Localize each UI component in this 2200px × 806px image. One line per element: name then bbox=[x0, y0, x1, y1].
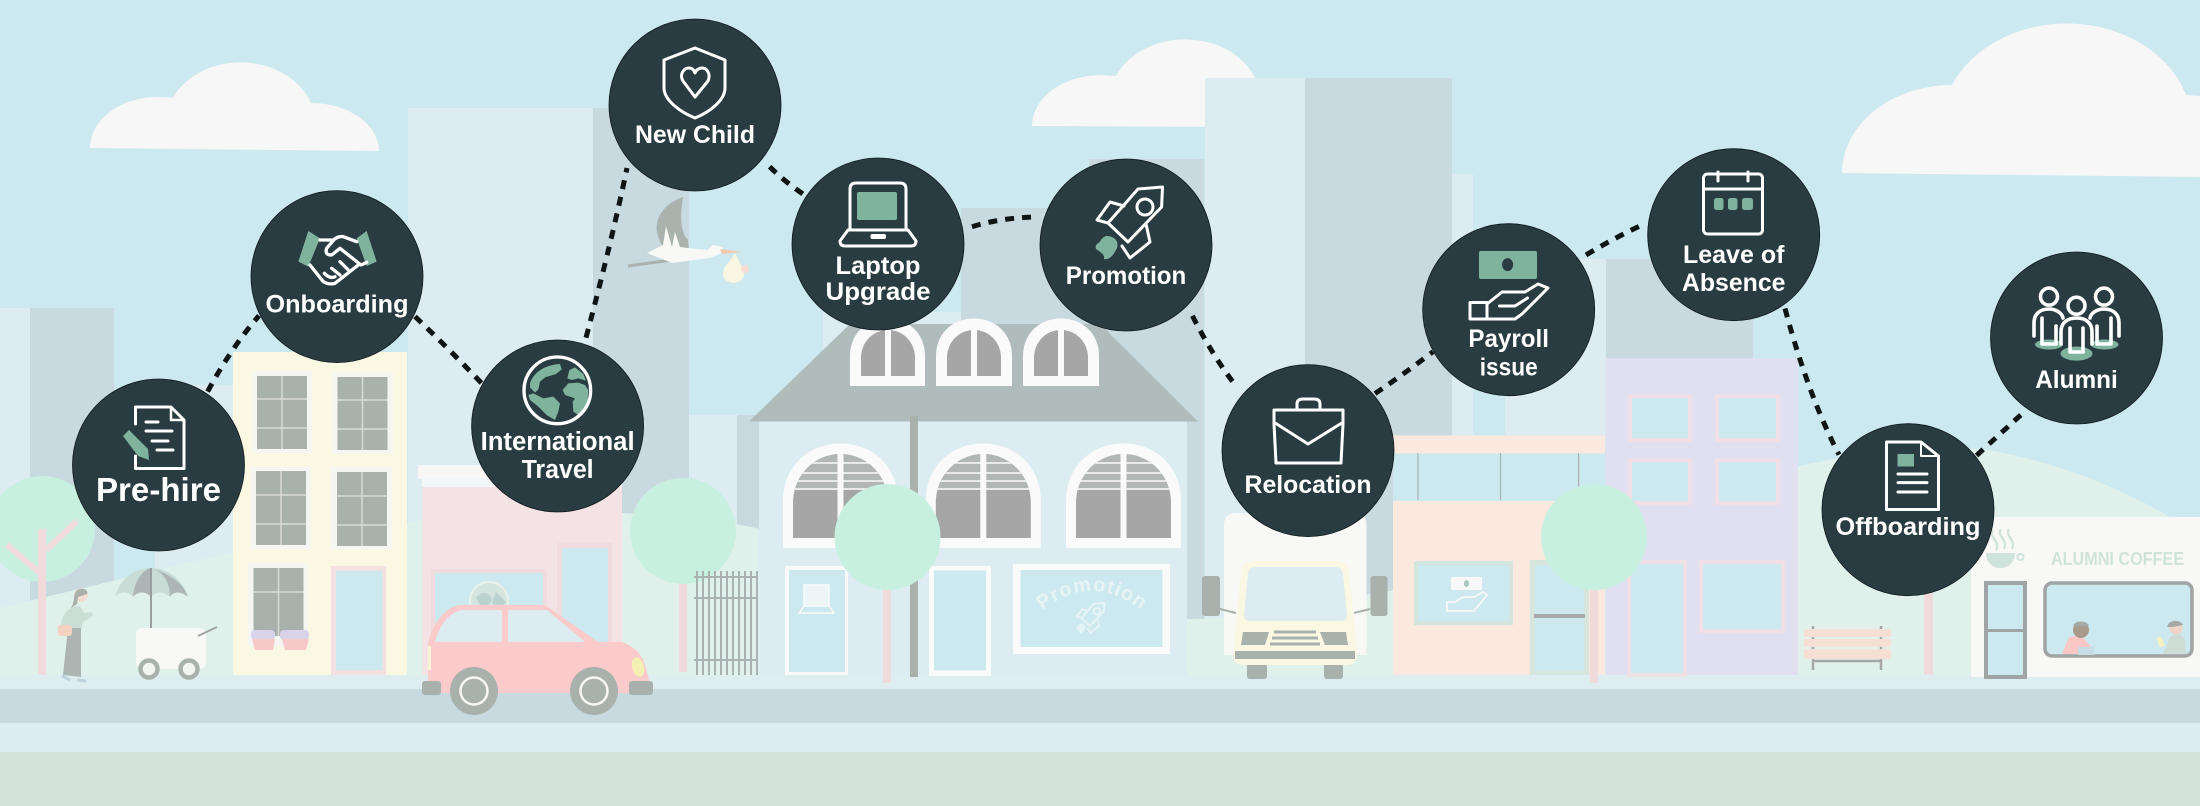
pavement and road bands bbox=[0, 675, 2200, 806]
icon: hand with banknote bbox=[1470, 251, 1548, 319]
node: Onboarding bbox=[251, 191, 423, 363]
label: New Child bbox=[635, 121, 755, 149]
icon: briefcase bbox=[1274, 399, 1343, 463]
icon: document and pencil bbox=[123, 407, 184, 468]
node: New Child bbox=[609, 19, 781, 191]
payroll sign bbox=[1447, 577, 1487, 611]
pink car bbox=[422, 605, 653, 715]
background hills bbox=[0, 448, 2200, 680]
label: International bbox=[481, 428, 635, 456]
arched windows bbox=[783, 444, 1181, 548]
right door bbox=[929, 566, 991, 676]
label: Leave of bbox=[1683, 241, 1785, 269]
peach shop bbox=[1393, 436, 1605, 675]
label line 2: Absence bbox=[1682, 269, 1786, 297]
dormer windows bbox=[850, 318, 1099, 386]
icon: rocket bbox=[1096, 187, 1162, 259]
main house bbox=[749, 318, 1198, 677]
arched shop text: Promotion bbox=[1036, 580, 1145, 610]
icon: shield with heart bbox=[664, 48, 725, 118]
car wheels bbox=[450, 667, 618, 715]
tree beside lilac building bbox=[1541, 484, 1647, 683]
icon: calendar bbox=[1704, 172, 1762, 234]
label: Relocation bbox=[1244, 471, 1372, 499]
cloud centre bbox=[1032, 39, 1256, 127]
flower boxes bbox=[251, 630, 309, 650]
park bench bbox=[1804, 626, 1891, 670]
shop window: promotion bbox=[1013, 564, 1170, 654]
node: Promotion bbox=[1040, 159, 1212, 331]
label: Payroll bbox=[1468, 325, 1549, 353]
drainpipe bbox=[910, 416, 918, 677]
icon: three people bbox=[2034, 288, 2119, 361]
label: Pre-hire bbox=[96, 471, 221, 508]
left door with laptop sign bbox=[785, 566, 848, 675]
stork with baby bundle bbox=[628, 197, 749, 283]
yellow townhouse bbox=[233, 352, 407, 675]
icon: globe bbox=[524, 357, 591, 424]
woman with phone bbox=[58, 588, 93, 681]
node: International Travel bbox=[472, 340, 644, 512]
label line 2: Upgrade bbox=[826, 278, 931, 306]
label: Offboarding bbox=[1836, 513, 1980, 541]
icon: document bbox=[1886, 442, 1938, 510]
cloud left bbox=[90, 62, 379, 151]
shop door bbox=[1986, 583, 2025, 677]
alumni coffee shop bbox=[1971, 517, 2200, 677]
label line 2: issue bbox=[1480, 354, 1538, 382]
icon: handshake bbox=[298, 231, 377, 284]
label: Promotion bbox=[1066, 262, 1186, 290]
node: Laptop Upgrade bbox=[792, 158, 964, 330]
dashed journey path bbox=[208, 167, 2022, 455]
iron fence bbox=[694, 571, 758, 675]
tree far left bbox=[0, 476, 95, 675]
moving truck bbox=[1202, 513, 1388, 679]
background towers bbox=[0, 78, 1753, 619]
cloud right bbox=[1842, 24, 2200, 177]
node: Relocation bbox=[1222, 365, 1394, 537]
node: Pre-hire bbox=[72, 379, 244, 551]
small rocket sign bbox=[1076, 603, 1104, 633]
shop window with customers bbox=[2045, 583, 2192, 656]
roof bbox=[749, 324, 1198, 422]
tree in front of house bbox=[834, 484, 940, 683]
label: Onboarding bbox=[266, 290, 408, 318]
shop sign: ALUMNI COFFEE bbox=[2051, 549, 2184, 569]
label line 2: Travel bbox=[522, 456, 594, 484]
coffee cup icon bbox=[1986, 529, 2024, 568]
node: Leave of Absence bbox=[1648, 149, 1820, 321]
small globe sign bbox=[470, 582, 508, 620]
node: Offboarding bbox=[1822, 424, 1994, 596]
tree beside fence bbox=[630, 478, 736, 672]
node: Payroll issue bbox=[1423, 224, 1595, 396]
tree trunk behind offboarding bbox=[1924, 560, 1933, 675]
lilac building bbox=[1606, 358, 1798, 675]
label: Laptop bbox=[836, 252, 920, 280]
node: Alumni bbox=[1990, 252, 2162, 424]
umbrella cart bbox=[115, 568, 217, 678]
pink shop bbox=[418, 465, 626, 675]
label: Alumni bbox=[2035, 366, 2118, 394]
icon: laptop bbox=[840, 183, 916, 246]
